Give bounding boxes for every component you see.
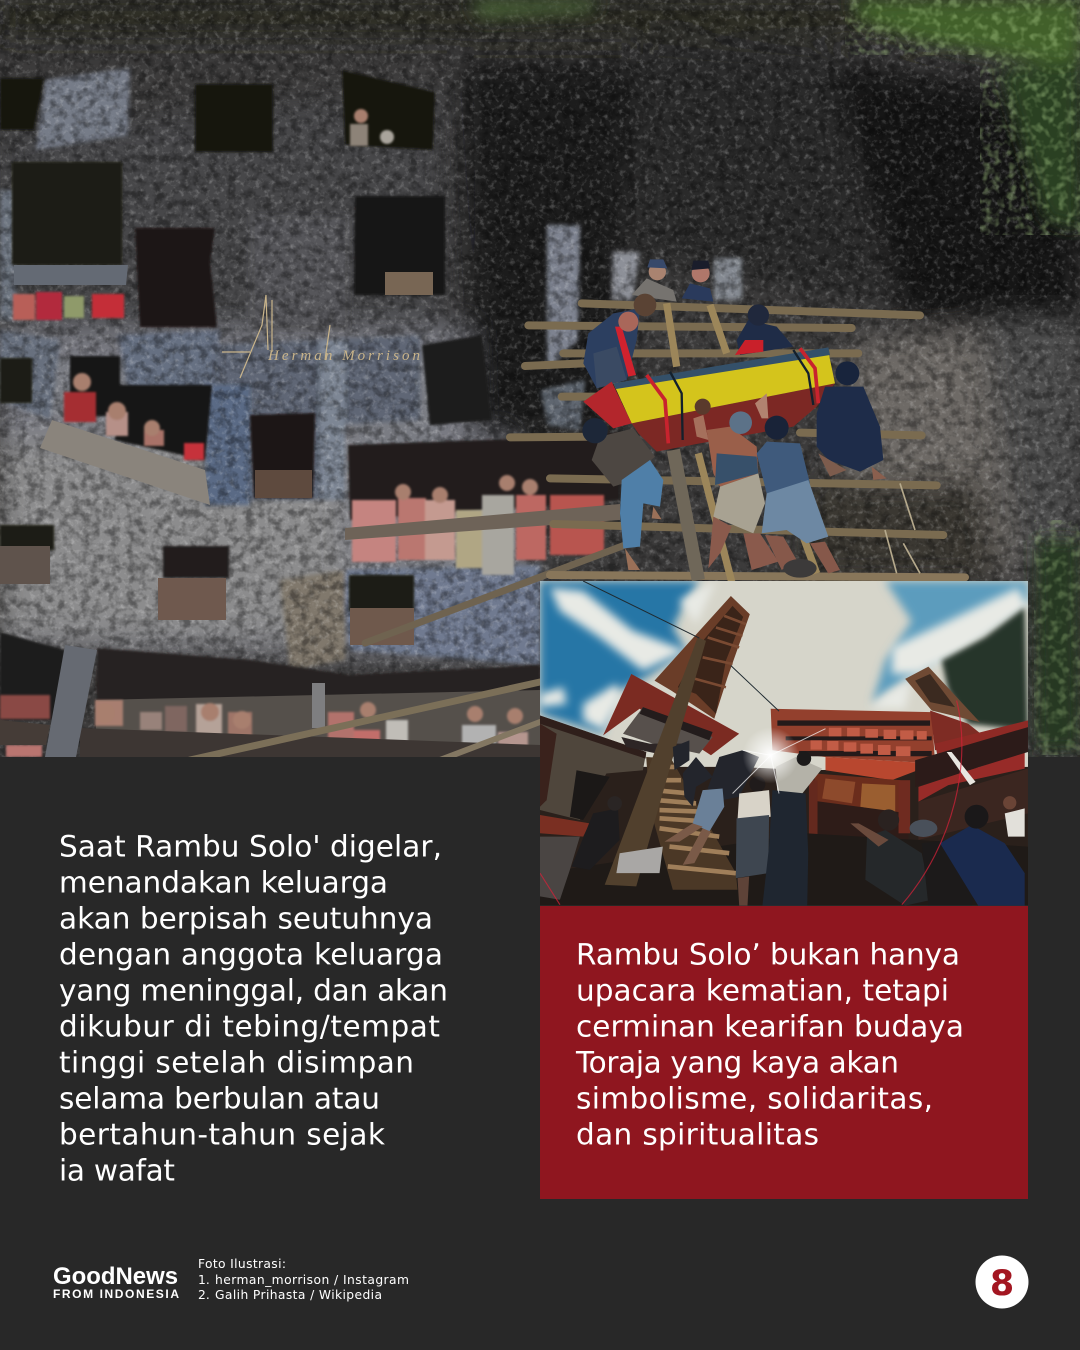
photo: cliff tombs with coffin being carried up bamboo scaffolding <box>0 0 1080 760</box>
photo credits <box>198 1257 409 1302</box>
page number badge <box>976 1256 1028 1308</box>
text block: burial explanation: dengan anggota keluarga <box>59 938 443 972</box>
man in white shirt <box>736 776 771 906</box>
photographer signature: Herman Morrison <box>267 348 420 364</box>
left patterned cloth and bystander <box>540 796 663 900</box>
conclusion text: dan spiritualitas <box>576 1118 819 1152</box>
text block: burial explanation: selama berbulan atau <box>59 1082 380 1116</box>
text block: burial explanation: Saat Rambu Solo' digelar, <box>59 830 442 864</box>
left house red wall <box>603 674 739 757</box>
right side eaves <box>915 720 1028 840</box>
coffin: red straps <box>647 348 818 443</box>
burial niches <box>0 70 620 735</box>
bamboo stairway <box>646 757 738 890</box>
text block: burial explanation: tinggi setelah disimpan <box>59 1046 414 1080</box>
logo: GoodNews from Indonesia: FROM INDONESIA <box>53 1287 179 1301</box>
conclusion text: simbolisme, solidaritas, <box>576 1082 933 1116</box>
text block: burial explanation: menandakan keluarga <box>59 866 388 900</box>
rock grain <box>0 0 1080 757</box>
lower left carrier <box>582 418 663 570</box>
photo credits: Galih Prihasta / Wikipedia <box>215 1288 382 1302</box>
dark ground mass behind figures <box>540 766 1028 869</box>
wooden doors and planks <box>0 265 620 757</box>
photo credits: 2. <box>198 1288 210 1302</box>
scaffold rungs back <box>510 303 965 577</box>
panel: red conclusion box <box>540 906 1028 1199</box>
wooden pole <box>605 637 706 886</box>
conclusion text: cerminan kearifan budaya <box>576 1010 964 1044</box>
logo: GoodNews from Indonesia: GoodNews <box>53 1263 178 1290</box>
far left building <box>540 715 646 820</box>
cave interior lighter wall behind figures <box>96 690 540 750</box>
photo: tongkonan houses and men under the sun <box>540 581 1028 906</box>
crouching men bottom right <box>850 796 1025 906</box>
coffin: yellow body <box>613 352 835 423</box>
left house saddle roof <box>655 596 750 719</box>
upper left carrier <box>583 294 656 388</box>
coffin: red hull <box>632 383 835 452</box>
conclusion text: upacara kematian, tetapi <box>576 974 949 1008</box>
coffin: carved end <box>583 382 632 428</box>
tourists on the stairs <box>673 740 759 807</box>
sun flare <box>733 727 825 793</box>
text block: burial explanation: bertahun-tahun sejak <box>59 1118 385 1152</box>
text block: burial explanation <box>59 830 448 1188</box>
text block: burial explanation: akan berpisah seutuhnya <box>59 902 433 936</box>
rock tone patches <box>0 0 1080 660</box>
carved red panel <box>808 774 910 834</box>
stone pillars <box>45 645 325 757</box>
foliage <box>470 0 1080 755</box>
upper right carrier <box>735 304 793 355</box>
centre blue shirt carrier <box>755 393 840 578</box>
dark tree <box>942 608 1028 730</box>
page number badge: 8 <box>990 1264 1014 1304</box>
man in jeans shorts <box>664 788 724 865</box>
coffin: blue stripe <box>613 347 830 389</box>
diagonal bamboo poles <box>190 545 625 760</box>
photo credits: 1. <box>198 1273 210 1287</box>
conclusion text <box>575 938 964 1152</box>
text block: burial explanation: yang meninggal, dan akan <box>59 974 448 1008</box>
tau-tau effigy figures <box>0 109 604 757</box>
right house roof <box>905 667 985 750</box>
conclusion text: Toraja yang kaya akan <box>575 1046 899 1080</box>
centre striped shirt carrier <box>693 399 778 570</box>
sky <box>540 581 1028 906</box>
conclusion text: Rambu Solo’ bukan hanya <box>576 938 960 972</box>
bamboo scaffolding and coffin carriers <box>510 259 965 582</box>
text block: burial explanation: ia wafat <box>59 1154 175 1188</box>
photo credits: herman_morrison / Instagram <box>215 1273 409 1287</box>
clouds <box>540 581 1028 730</box>
photographer signature <box>222 295 420 378</box>
bottom dark shadow <box>540 833 1028 906</box>
lower right carrier <box>817 361 887 480</box>
right house facade <box>771 709 935 780</box>
man in grey shirt <box>762 751 822 906</box>
text block: burial explanation: dikubur di tebing/tempat <box>59 1010 440 1044</box>
red lens flare arc <box>540 701 962 905</box>
men at top <box>632 259 713 302</box>
photo credits: Foto Ilustrasi: <box>198 1257 286 1271</box>
light stone blocks <box>0 68 742 670</box>
cable <box>583 581 779 711</box>
